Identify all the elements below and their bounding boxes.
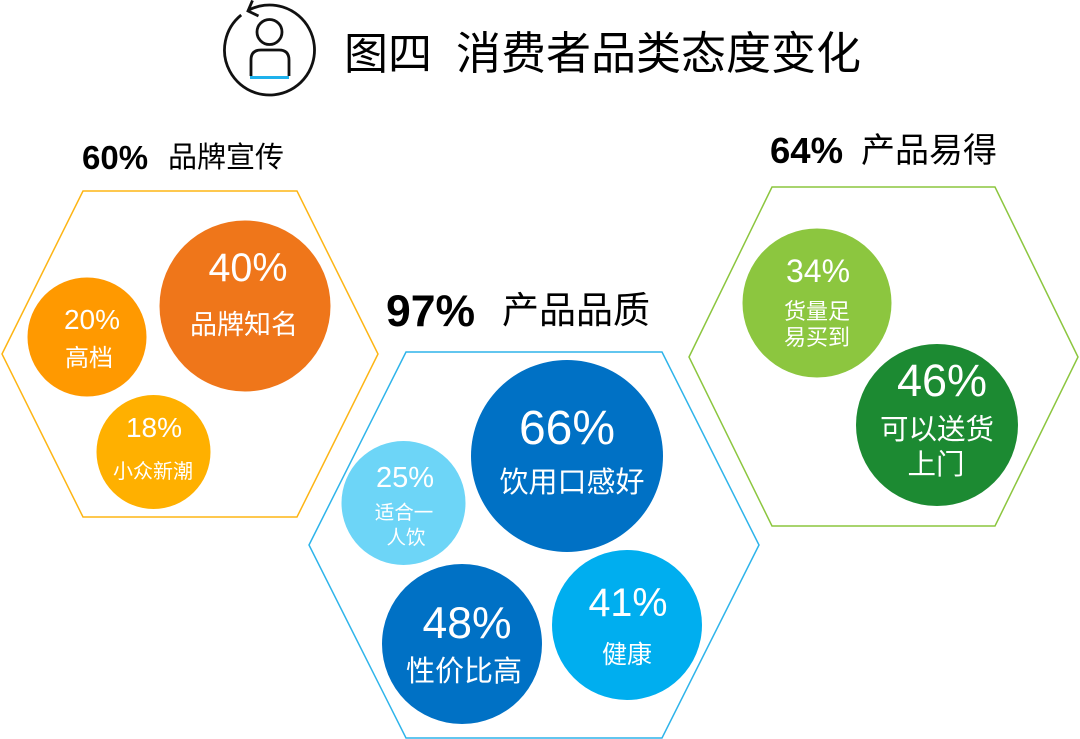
bubble: 48% value for money bbox=[382, 564, 542, 724]
heading: 97% quality: 产品品质 bbox=[502, 290, 650, 331]
bubble: 34% sufficient stock bbox=[742, 228, 892, 378]
panel: product quality bbox=[309, 287, 759, 738]
bubble: 20% premium: 20% bbox=[64, 304, 120, 335]
bubble: 20% premium: 高档 bbox=[65, 345, 113, 372]
heading: 64% availability: 64% bbox=[770, 130, 843, 171]
bubble: 48% value for money: 48% bbox=[422, 599, 512, 648]
bubble: 34% sufficient stock: 货量足 bbox=[784, 299, 850, 324]
bubble: 48% value for money: 性价比高 bbox=[406, 655, 522, 688]
bubble: 66% good taste bbox=[471, 360, 663, 552]
bubble: 25% suits one person: 适合一 bbox=[375, 502, 433, 524]
bubble: 18% niche trendy bbox=[96, 395, 210, 509]
bubble: 18% niche trendy: 小众新潮 bbox=[113, 460, 193, 483]
heading: 64% availability: 产品易得 bbox=[861, 132, 997, 170]
heading: 60% brand promotion bbox=[82, 139, 284, 176]
bubble: 46% delivery bbox=[856, 344, 1018, 506]
title: 图四 bbox=[344, 30, 432, 79]
bubble: 46% delivery: 上门 bbox=[907, 449, 965, 481]
bubble: 66% good taste: 66% bbox=[519, 402, 615, 455]
bubble: 41% healthy bbox=[552, 550, 702, 700]
heading: 60% brand promotion: 品牌宣传 bbox=[168, 141, 284, 174]
bubble: 18% niche trendy: 18% bbox=[126, 412, 182, 443]
heading: 97% quality: 97% bbox=[386, 287, 475, 336]
bubble: 46% delivery: 46% bbox=[897, 355, 987, 406]
panel: brand promotion bbox=[2, 139, 378, 517]
icon: person with rotation arrow bbox=[209, 0, 330, 111]
hexagon outline: quality bbox=[309, 352, 759, 738]
bubble: 40% well-known brand: 品牌知名 bbox=[190, 310, 298, 340]
bubble: 20% premium bbox=[28, 278, 146, 396]
hexagon outline: availability bbox=[689, 187, 1078, 526]
bubble: 41% healthy: 41% bbox=[588, 581, 668, 625]
heading: 60% brand promotion: 60% bbox=[82, 139, 148, 176]
heading: 97% quality bbox=[386, 287, 650, 336]
heading: 64% availability bbox=[770, 130, 997, 171]
bubble: 40% well-known brand bbox=[160, 220, 330, 392]
bubble: 66% good taste: 饮用口感好 bbox=[499, 466, 645, 499]
bubble: 25% suits one person: 25% bbox=[376, 462, 434, 494]
title subtitle: 消费者品类态度变化 bbox=[456, 28, 861, 79]
bubble: 41% healthy: 健康 bbox=[602, 641, 652, 669]
bubble: 25% suits one person bbox=[342, 441, 466, 565]
panel: product availability bbox=[689, 130, 1078, 526]
bubble: 34% sufficient stock: 易买到 bbox=[784, 325, 850, 350]
bubble: 40% well-known brand: 40% bbox=[208, 246, 288, 290]
bubble: 46% delivery: 可以送货 bbox=[880, 414, 994, 446]
hexagon outline: brand bbox=[2, 191, 378, 517]
bubble: 25% suits one person: 人饮 bbox=[386, 527, 426, 549]
bubble: 34% sufficient stock: 34% bbox=[786, 253, 850, 289]
